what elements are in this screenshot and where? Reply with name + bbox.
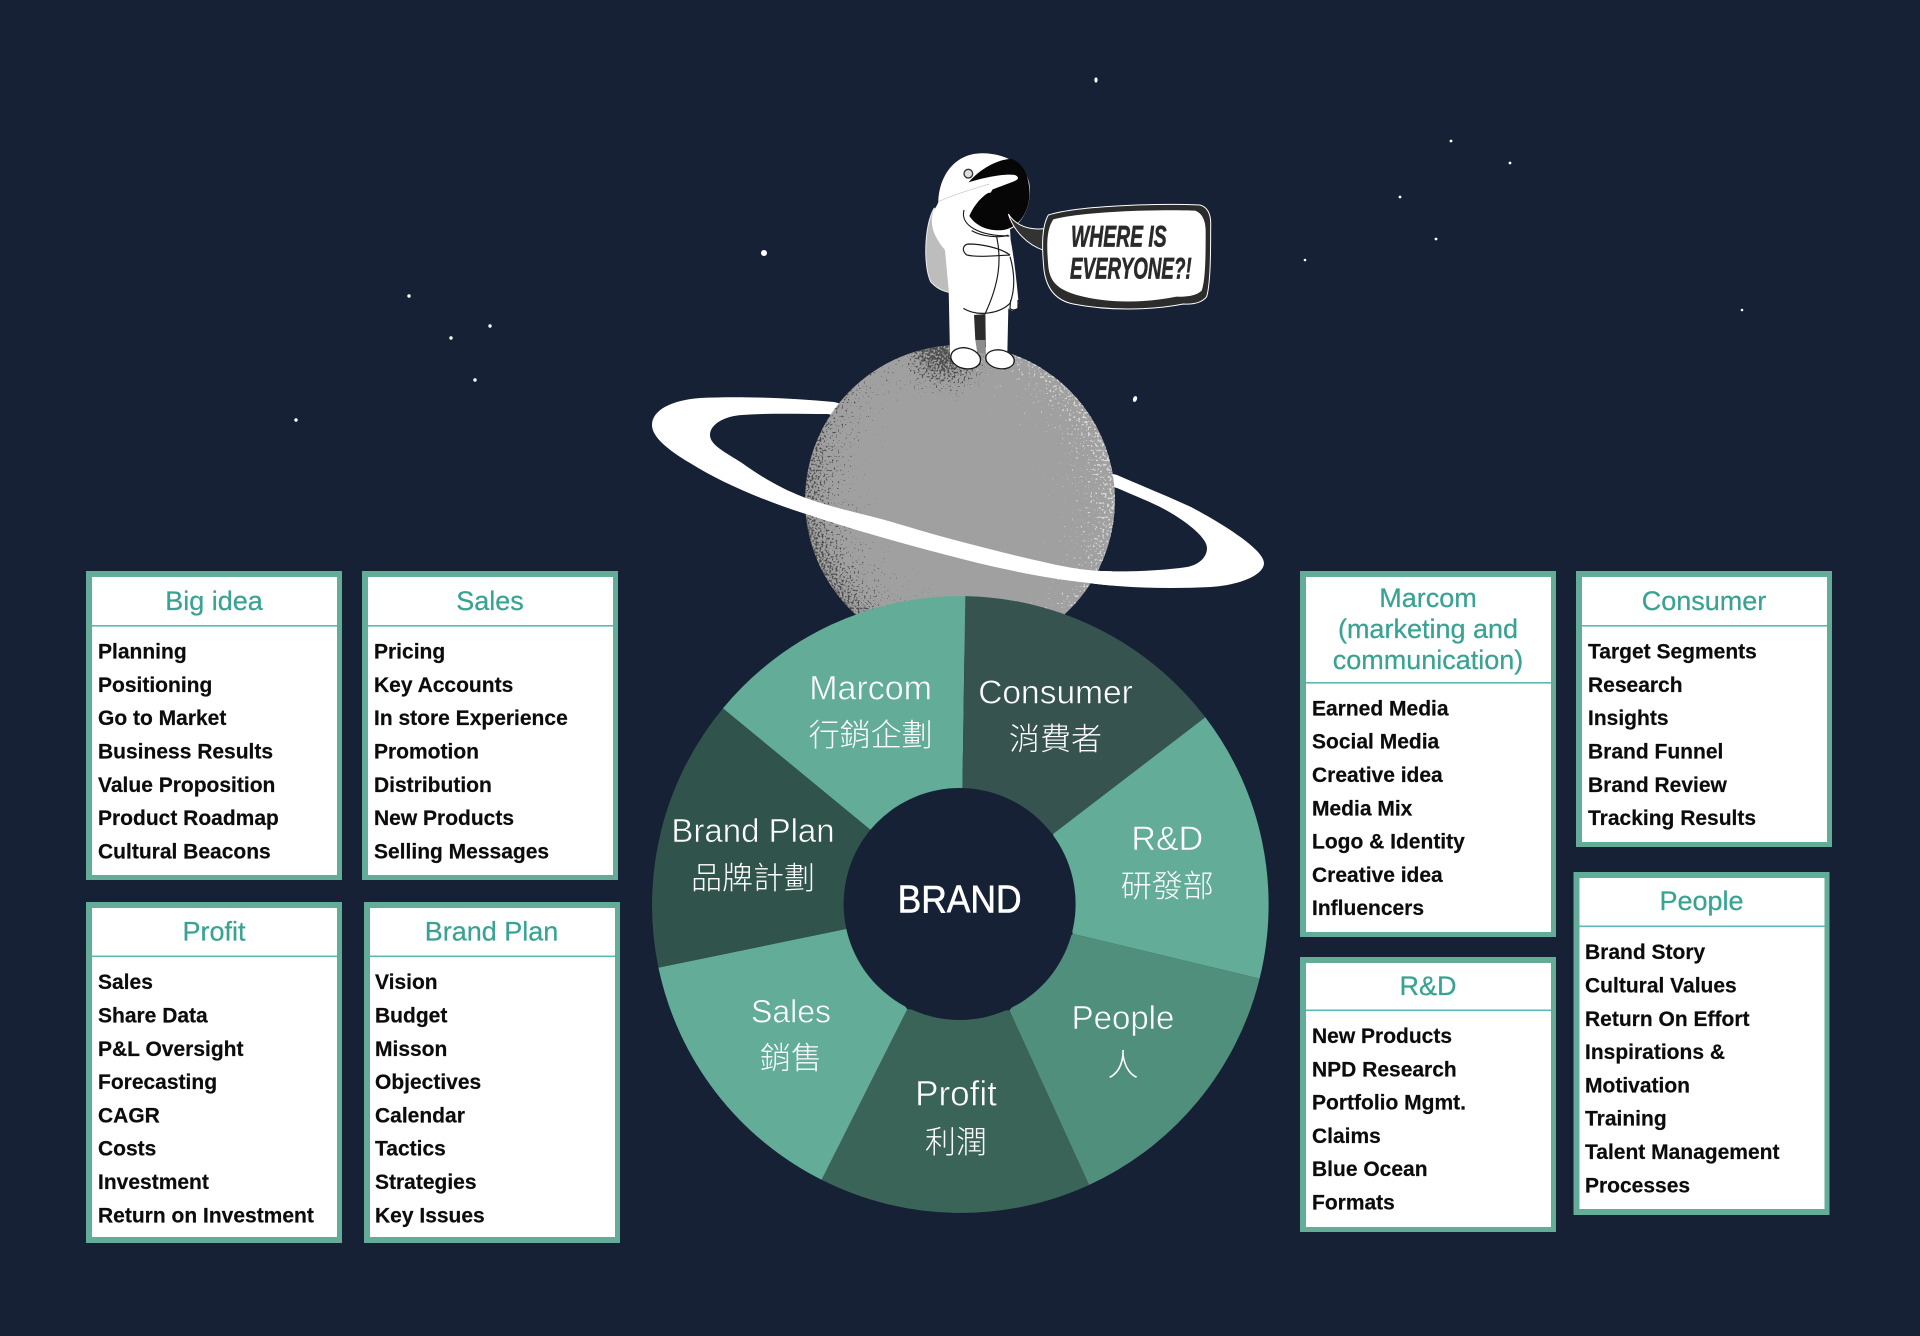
panel: Brand Plan [364, 902, 620, 1243]
list: R&D: New Products [1312, 1025, 1452, 1048]
heading: Consumer: Consumer [1642, 586, 1766, 616]
list: Big idea: Product Roadmap [98, 807, 279, 830]
brand wheel [652, 596, 1269, 1213]
list: Consumer: Target Segments [1588, 641, 1757, 664]
speech text: WHERE IS [1071, 221, 1167, 254]
heading: Marcom: communication) [1333, 645, 1523, 675]
label: Consumer [978, 674, 1133, 757]
list: Brand Plan: Vision [375, 971, 438, 994]
label: R&D: R&D [1131, 820, 1203, 858]
label: Sales: Sales [751, 994, 831, 1030]
speech text: EVERYONE?! [1070, 253, 1192, 286]
speech text [1070, 221, 1192, 286]
label: Consumer: 消費者 [1009, 722, 1102, 757]
label: Profit [915, 1074, 997, 1160]
list: Marcom: Influencers [1312, 897, 1424, 920]
list: R&D: Portfolio Mgmt. [1312, 1092, 1466, 1115]
list: People: Inspirations & [1585, 1041, 1725, 1064]
backpack [926, 208, 951, 293]
helmet knob [964, 169, 973, 178]
heading: People: People [1659, 886, 1744, 916]
heading: Brand Plan: Brand Plan [425, 916, 558, 946]
label: Consumer: Consumer [978, 674, 1133, 712]
list: People: Motivation [1585, 1074, 1690, 1097]
list: Profit: Share Data [98, 1004, 208, 1028]
list: Consumer: Brand Funnel [1588, 740, 1723, 764]
label: Sales [751, 994, 831, 1076]
list: Marcom: Earned Media [1312, 697, 1449, 720]
label: Brand Plan: Brand Plan [671, 812, 835, 849]
list: Marcom: Creative idea [1312, 764, 1443, 787]
segment: R&D [1053, 717, 1269, 979]
list: Sales: Pricing [374, 641, 445, 664]
segment: Brand Plan [652, 708, 871, 968]
list: Big idea: Business Results [98, 740, 273, 764]
list: People: Talent Management [1585, 1141, 1779, 1164]
list: Consumer: Insights [1588, 707, 1669, 730]
label: Brand Plan [671, 812, 835, 896]
panel: R&D [1300, 957, 1556, 1232]
list: Profit: Sales [98, 971, 153, 994]
list: Marcom: Logo & Identity [1312, 831, 1465, 854]
list: Brand Plan: Key Issues [375, 1204, 485, 1227]
list: Sales: In store Experience [374, 707, 568, 730]
label: Sales: 銷售 [760, 1041, 822, 1076]
heading: Profit: Profit [182, 916, 246, 946]
panel: Sales [362, 571, 618, 880]
segment: Profit [822, 1009, 1089, 1213]
visor [968, 159, 1029, 230]
astronaut [926, 153, 1211, 372]
list: People: Training [1585, 1108, 1667, 1131]
segment: Marcom [723, 596, 965, 830]
list: People: Cultural Values [1585, 974, 1737, 998]
panel: Profit [86, 902, 342, 1243]
list: People: Processes [1585, 1174, 1690, 1197]
list: Brand Plan: Budget [375, 1004, 447, 1028]
list: Sales: Key Accounts [374, 674, 513, 697]
label: Brand Plan: 品牌計劃 [691, 861, 815, 896]
label: Profit: Profit [915, 1074, 997, 1114]
list: Sales: Promotion [374, 740, 479, 764]
label: Marcom: 行銷企劃 [809, 718, 933, 753]
list: Brand Plan: Misson [375, 1038, 447, 1061]
list: R&D: Claims [1312, 1125, 1381, 1148]
speech bubble [1008, 204, 1211, 309]
panel: People [1574, 872, 1830, 1215]
center label: BRAND [898, 878, 1022, 921]
list: Profit: Return on Investment [98, 1204, 314, 1227]
list: Profit: Forecasting [98, 1071, 217, 1094]
list: Profit: Costs [98, 1138, 156, 1161]
feet [949, 345, 982, 372]
list: Big idea: Value Proposition [98, 774, 275, 797]
list: Sales: New Products [374, 807, 514, 830]
label: Marcom [809, 669, 933, 753]
label: R&D [1121, 820, 1214, 904]
planet with ring [652, 340, 1264, 660]
label: R&D: 研發部 [1121, 869, 1214, 904]
heading: Big idea: Big idea [165, 586, 264, 616]
segment: Consumer [962, 596, 1205, 834]
glove [957, 175, 1018, 207]
planet sphere [800, 340, 1120, 660]
list: Big idea: Positioning [98, 674, 212, 697]
ring back [652, 397, 1264, 588]
list: Big idea: Planning [98, 641, 187, 664]
panel: Marcom [1300, 571, 1556, 937]
heading: Marcom: (marketing and [1338, 614, 1518, 644]
list: Consumer: Brand Review [1588, 774, 1728, 797]
list: People: Return On Effort [1585, 1008, 1749, 1031]
list: Sales: Selling Messages [374, 840, 549, 863]
list: Brand Plan: Objectives [375, 1071, 481, 1094]
heading: Sales: Sales [456, 586, 524, 616]
list: Brand Plan: Calendar [375, 1104, 465, 1127]
segment: People [1009, 934, 1260, 1185]
list: R&D: NPD Research [1312, 1058, 1457, 1081]
ring front [790, 492, 1112, 586]
list: Profit: CAGR [98, 1104, 160, 1127]
label: Marcom: Marcom [809, 669, 932, 707]
list: Consumer: Tracking Results [1588, 807, 1756, 830]
panel: Big idea [86, 571, 342, 880]
list: Marcom: Media Mix [1312, 797, 1413, 820]
label: Profit: 利潤 [925, 1125, 987, 1160]
list: People: Brand Story [1585, 941, 1705, 964]
list: R&D: Blue Ocean [1312, 1158, 1428, 1181]
heading: R&D: R&D [1399, 971, 1457, 1001]
list: Brand Plan: Tactics [375, 1138, 446, 1161]
list: Marcom: Creative idea [1312, 864, 1443, 887]
list: Consumer: Research [1588, 674, 1683, 697]
list: Marcom: Social Media [1312, 731, 1440, 754]
list: Profit: Investment [98, 1171, 209, 1194]
panel: Consumer [1576, 571, 1832, 847]
leg gap [974, 314, 985, 340]
heading: Marcom: Marcom [1379, 583, 1477, 613]
list: Profit: P&L Oversight [98, 1038, 243, 1061]
label: People [1072, 999, 1174, 1083]
center circle [844, 788, 1076, 1020]
list: Big idea: Go to Market [98, 707, 226, 730]
label: People: 人 [1108, 1048, 1138, 1083]
suit lines [938, 184, 1018, 314]
list: R&D: Formats [1312, 1192, 1395, 1214]
suit silhouette [932, 153, 1030, 369]
segment: Sales [658, 929, 907, 1180]
label: People: People [1072, 999, 1174, 1036]
stars [294, 77, 1743, 422]
list: Brand Plan: Strategies [375, 1171, 477, 1194]
list: Big idea: Cultural Beacons [98, 840, 271, 863]
list: Sales: Distribution [374, 774, 492, 797]
